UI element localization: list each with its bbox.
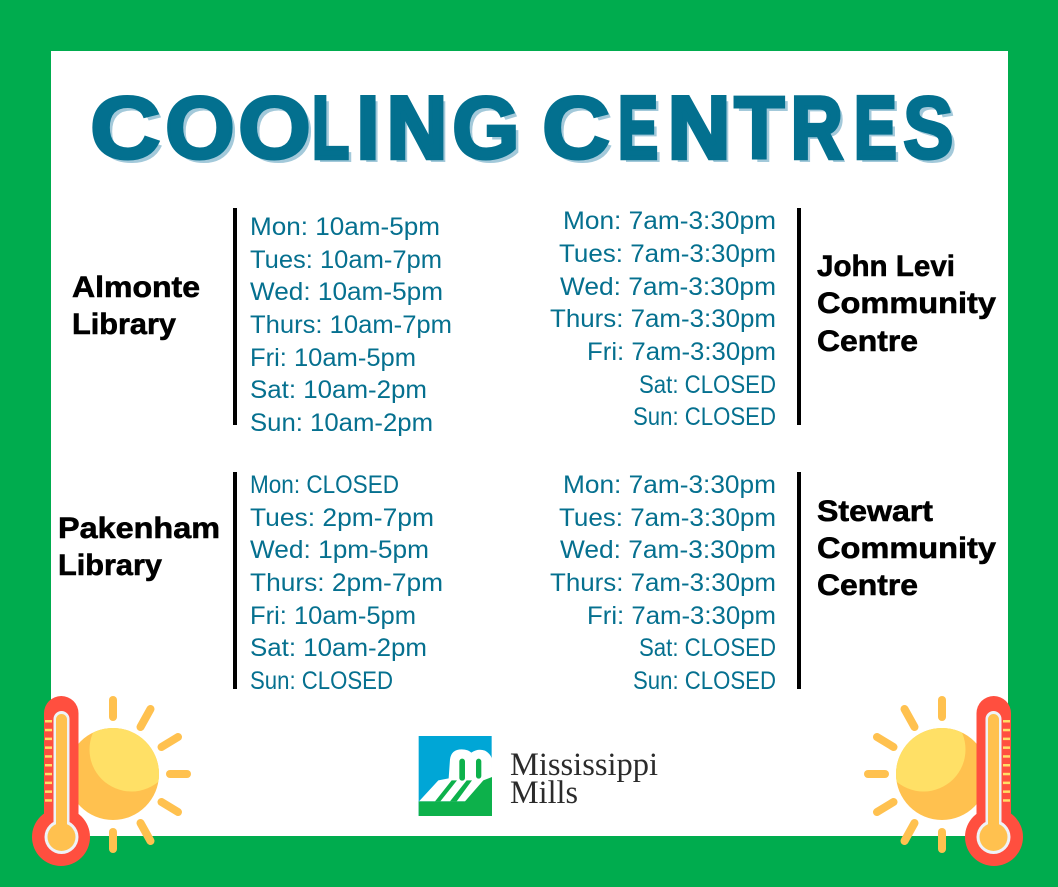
hours: Stewart Community Centre xyxy=(550,471,776,695)
hours: Stewart Community Centre: Sat: CLOSED xyxy=(639,634,776,662)
title: N xyxy=(387,78,447,177)
hours: Almonte Library: Sun: 10am-2pm xyxy=(250,409,433,437)
hours: John Levi Community Centre: Mon: 7am-3:30pm xyxy=(563,207,776,235)
logo: Mississippi Mills xyxy=(419,736,658,816)
panel: Pakenham Library xyxy=(58,471,443,695)
hours: John Levi Community Centre: Sat: CLOSED xyxy=(639,371,776,399)
divider bar xyxy=(797,208,801,425)
hours: John Levi Community Centre: Tues: 7am-3:30pm xyxy=(559,240,776,268)
label: John Levi Community Centre xyxy=(817,250,996,358)
hours: Pakenham Library: Mon: CLOSED xyxy=(250,471,399,499)
divider bar xyxy=(797,472,801,689)
title: I xyxy=(356,78,378,177)
title xyxy=(90,78,955,177)
hours: Almonte Library: Tues: 10am-7pm xyxy=(250,246,442,274)
hours: John Levi Community Centre: Sun: CLOSED xyxy=(633,403,776,431)
hours: Almonte Library: Sat: 10am-2pm xyxy=(250,376,427,404)
title: E xyxy=(854,78,897,177)
hours: Pakenham Library xyxy=(250,471,443,695)
label: Pakenham Library xyxy=(58,512,220,582)
label: Stewart Community Centre xyxy=(817,495,996,602)
hours: John Levi Community Centre: Thurs: 7am-3:30pm xyxy=(550,305,776,333)
logo mark xyxy=(419,736,492,816)
logo wordmark: Mills xyxy=(510,775,578,811)
title: G xyxy=(452,78,520,177)
hours: Almonte Library: Mon: 10am-5pm xyxy=(250,213,440,241)
icon: sun and thermometer, right xyxy=(868,696,1023,866)
hours: Pakenham Library: Thurs: 2pm-7pm xyxy=(250,569,443,597)
hours: Pakenham Library: Sun: CLOSED xyxy=(250,667,393,695)
panel: Stewart Community Centre xyxy=(550,471,996,695)
title: T xyxy=(734,78,785,177)
hours: Almonte Library xyxy=(250,213,452,437)
label: Stewart Community Centre: Community xyxy=(817,532,996,565)
label: Stewart Community Centre: Centre xyxy=(817,569,918,602)
label: John Levi Community Centre: Centre xyxy=(817,325,918,358)
hours: Stewart Community Centre: Sun: CLOSED xyxy=(633,667,776,695)
hours: John Levi Community Centre: Wed: 7am-3:30pm xyxy=(560,273,776,301)
label: John Levi Community Centre: Community xyxy=(817,287,996,320)
panel: Almonte Library xyxy=(72,208,452,437)
icon: sun and thermometer, left xyxy=(32,696,187,866)
hours: Almonte Library: Thurs: 10am-7pm xyxy=(250,311,452,339)
label: Pakenham Library: Library xyxy=(58,549,162,582)
title: O xyxy=(165,78,235,177)
hours: Stewart Community Centre: Thurs: 7am-3:30pm xyxy=(550,569,776,597)
label: Stewart Community Centre: Stewart xyxy=(817,495,933,528)
title: S xyxy=(903,78,953,177)
title: L xyxy=(312,78,349,177)
hours: Pakenham Library: Sat: 10am-2pm xyxy=(250,634,427,662)
label: Almonte Library xyxy=(72,271,200,341)
logo wordmark: Mississippi xyxy=(510,747,658,783)
label: John Levi Community Centre: John Levi xyxy=(817,250,955,283)
hours: Pakenham Library: Fri: 10am-5pm xyxy=(250,602,416,630)
panel: John Levi Community Centre xyxy=(550,207,996,431)
hours: Stewart Community Centre: Tues: 7am-3:30pm xyxy=(559,504,776,532)
title: O xyxy=(238,78,311,177)
title: N xyxy=(668,78,730,177)
label: Almonte Library: Almonte xyxy=(72,271,200,304)
title: C xyxy=(542,78,610,177)
hours: Stewart Community Centre: Mon: 7am-3:30pm xyxy=(563,471,776,499)
title: R xyxy=(791,78,843,177)
divider bar xyxy=(233,472,237,689)
hours: John Levi Community Centre: Fri: 7am-3:30pm xyxy=(587,338,776,366)
logo wordmark xyxy=(510,747,658,811)
title: E xyxy=(618,78,658,177)
hours: Almonte Library: Fri: 10am-5pm xyxy=(250,344,416,372)
hours: Pakenham Library: Wed: 1pm-5pm xyxy=(250,536,429,564)
label: Pakenham Library: Pakenham xyxy=(58,512,220,545)
divider bar xyxy=(233,208,237,425)
label: Almonte Library: Library xyxy=(72,308,176,341)
hours: Almonte Library: Wed: 10am-5pm xyxy=(250,278,443,306)
hours: Stewart Community Centre: Wed: 7am-3:30pm xyxy=(560,536,776,564)
title: C xyxy=(90,78,161,177)
hours: Pakenham Library: Tues: 2pm-7pm xyxy=(250,504,434,532)
hours: Stewart Community Centre: Fri: 7am-3:30pm xyxy=(587,602,776,630)
hours: John Levi Community Centre xyxy=(550,207,776,431)
